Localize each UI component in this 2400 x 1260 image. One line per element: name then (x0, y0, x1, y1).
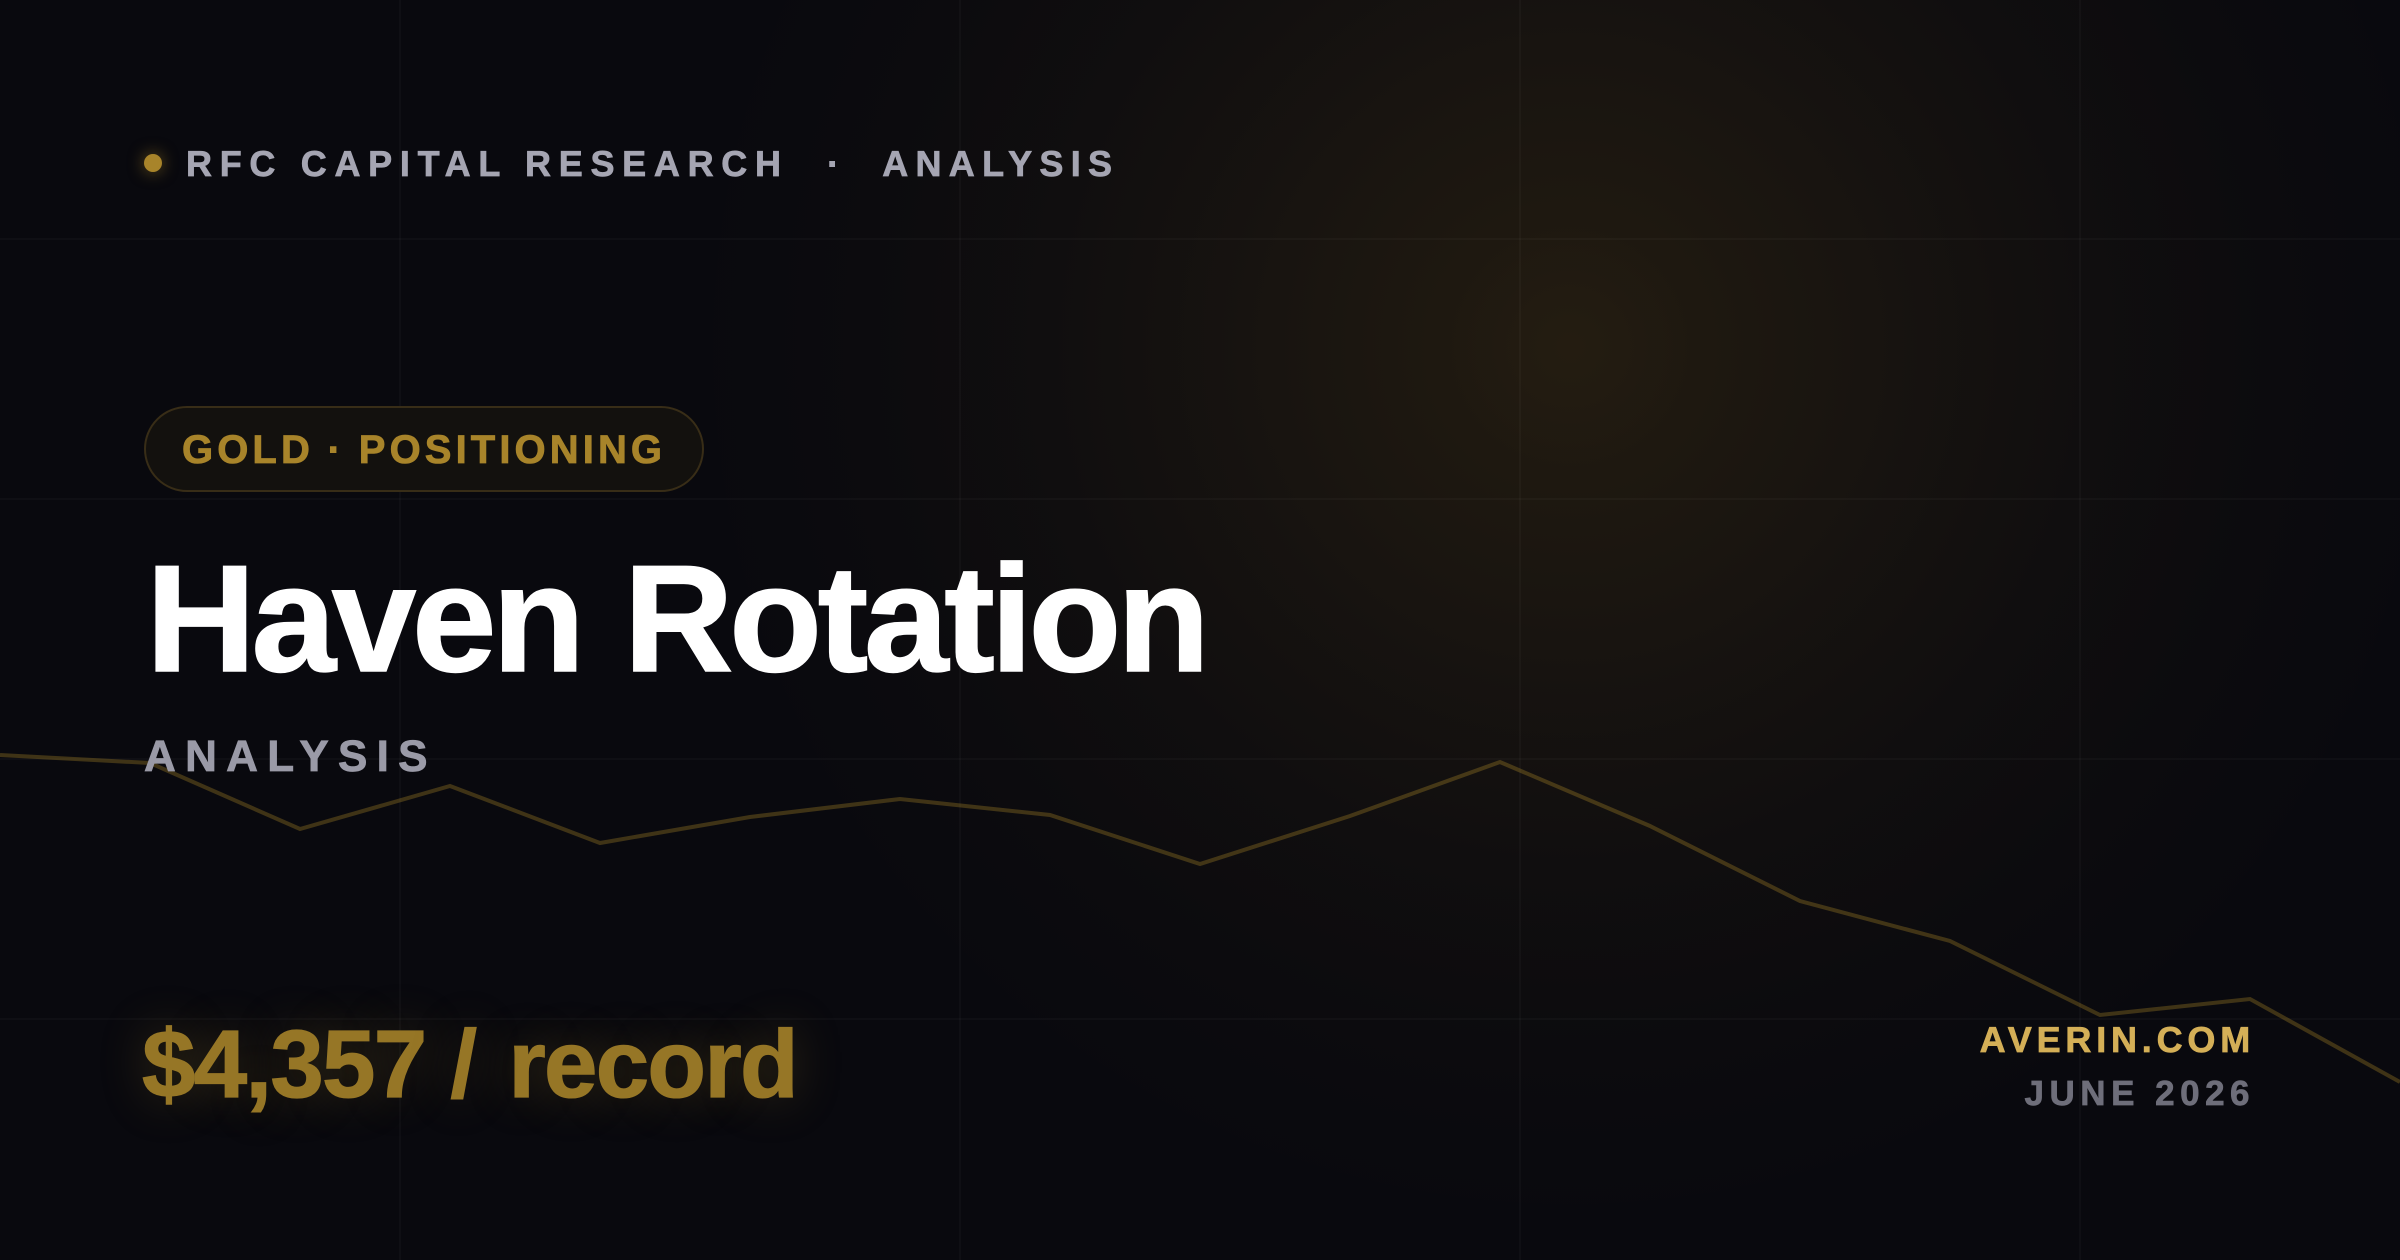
price headline: $4,357 / record (142, 1011, 797, 1118)
icon: gold status dot (144, 154, 162, 172)
title: Haven Rotation (146, 534, 1206, 704)
date: JUNE 2026 (2025, 1074, 2255, 1113)
site name: AVERIN.COM (1980, 1019, 2255, 1060)
header text: RFC CAPITAL RESEARCH · ANALYSIS (186, 143, 1119, 184)
header: research label (136, 143, 1119, 184)
tag text: GOLD · POSITIONING (182, 428, 666, 472)
tag pill: gold positioning (144, 406, 704, 492)
subtitle: ANALYSIS (144, 732, 437, 781)
